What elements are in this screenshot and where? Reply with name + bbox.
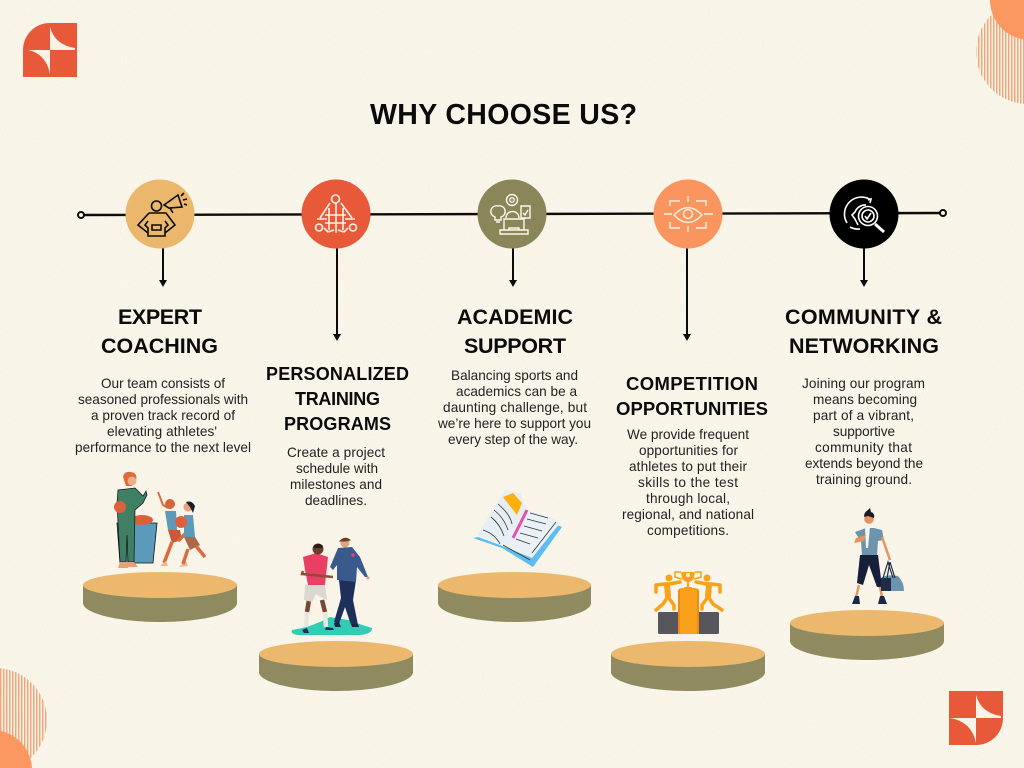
timeline line <box>78 210 946 218</box>
text: academic support description: daunting challenge, but <box>443 400 587 415</box>
title: WHY CHOOSE US? <box>370 99 637 131</box>
column: personalized training text <box>266 364 409 508</box>
podium 3 <box>438 572 591 622</box>
icon: coach with megaphone <box>126 180 194 248</box>
decoration: bottom left stripes and circle <box>0 668 47 768</box>
decoration: top right stripes and circle <box>976 0 1024 104</box>
text: community description: part of a vibrant, <box>813 408 914 423</box>
text: personalized training description: Create a project <box>287 445 385 460</box>
text: community description: community that <box>815 440 912 455</box>
podium 5 <box>790 610 944 660</box>
heading: competition opportunities: COMPETITION <box>626 373 758 394</box>
text: expert coaching description: a proven track record of <box>91 408 235 423</box>
icon: gear and magnifier <box>830 180 898 248</box>
text: personalized training description: schedule with <box>296 461 378 476</box>
podium 4 <box>611 641 765 691</box>
text: competition description: skills to the test <box>638 475 738 490</box>
illustration: open book <box>473 490 562 567</box>
text: expert coaching description: Our team consists of <box>101 376 225 391</box>
text: personalized training description <box>287 445 385 508</box>
text: community description: training ground. <box>816 472 912 487</box>
text: personalized training description: milestones and <box>290 477 382 492</box>
heading: academic support: ACADEMIC <box>457 305 573 329</box>
text: competition description: We provide frequent <box>627 427 749 442</box>
text: community description <box>802 376 925 487</box>
heading: expert coaching: EXPERT <box>118 305 202 329</box>
arrow: personalized training <box>333 248 341 341</box>
text: academic support description: Balancing sports and <box>451 368 578 383</box>
text: community description: means becoming <box>813 392 917 407</box>
text: competition description: regional, and national <box>622 507 754 522</box>
heading: community and networking: NETWORKING <box>789 334 939 358</box>
column: community text <box>785 305 942 487</box>
text: community description: Joining our program <box>802 376 925 391</box>
text: expert coaching description: elevating athletes' <box>107 424 217 439</box>
text: personalized training description: deadlines. <box>305 493 367 508</box>
text: competition description: athletes to put their <box>629 459 747 474</box>
heading: expert coaching <box>101 305 218 358</box>
podium 1 <box>83 572 237 622</box>
column: academic support text <box>437 305 591 447</box>
text: expert coaching description: performance to the next level <box>75 440 251 455</box>
illustration: athlete with gym bag <box>852 508 904 604</box>
icon: team triangle <box>302 180 370 248</box>
text: expert coaching description: seasoned professionals with <box>78 392 248 407</box>
icon: academic laptop <box>478 180 546 248</box>
heading: personalized training programs: PROGRAMS <box>284 414 391 434</box>
text: competition description <box>622 427 754 538</box>
heading: expert coaching: COACHING <box>101 334 218 358</box>
illustration: two men walking <box>292 538 372 635</box>
text: academic support description: we’re here to support you <box>437 416 591 431</box>
heading: personalized training programs <box>266 364 409 434</box>
arrow: community <box>860 248 868 287</box>
heading: academic support <box>457 305 573 358</box>
heading: academic support: SUPPORT <box>464 334 566 358</box>
logo: bottom right <box>949 691 1003 745</box>
arrow: competition <box>683 248 691 341</box>
text: competition description: through local, <box>646 491 730 506</box>
text: community description: supportive <box>833 424 895 439</box>
text: community description: extends beyond the <box>805 456 923 471</box>
heading: community and networking: COMMUNITY & <box>785 305 942 329</box>
heading: community and networking <box>785 305 942 358</box>
illustration: trophy podium and runners <box>656 572 722 634</box>
text: competition description: opportunities for <box>639 443 738 458</box>
text: academic support description: every step of the way. <box>448 432 578 447</box>
logo: top left <box>23 23 77 77</box>
heading: personalized training programs: TRAINING <box>295 389 380 409</box>
column: expert coaching text <box>75 305 251 455</box>
heading: personalized training programs: PERSONALIZED <box>266 364 409 384</box>
illustration: coach and children <box>114 472 205 568</box>
heading: competition opportunities <box>616 373 768 419</box>
arrow: expert coaching <box>159 248 167 287</box>
text: expert coaching description <box>75 376 251 455</box>
text: academic support description <box>437 368 591 447</box>
podium 2 <box>259 641 413 691</box>
text: academic support description: academics can be a <box>456 384 577 399</box>
column: competition text <box>616 373 768 538</box>
heading: competition opportunities: OPPORTUNITIES <box>616 398 768 419</box>
icon: eye focus <box>654 180 722 248</box>
text: competition description: competitions. <box>647 523 729 538</box>
arrow: academic support <box>509 248 517 287</box>
